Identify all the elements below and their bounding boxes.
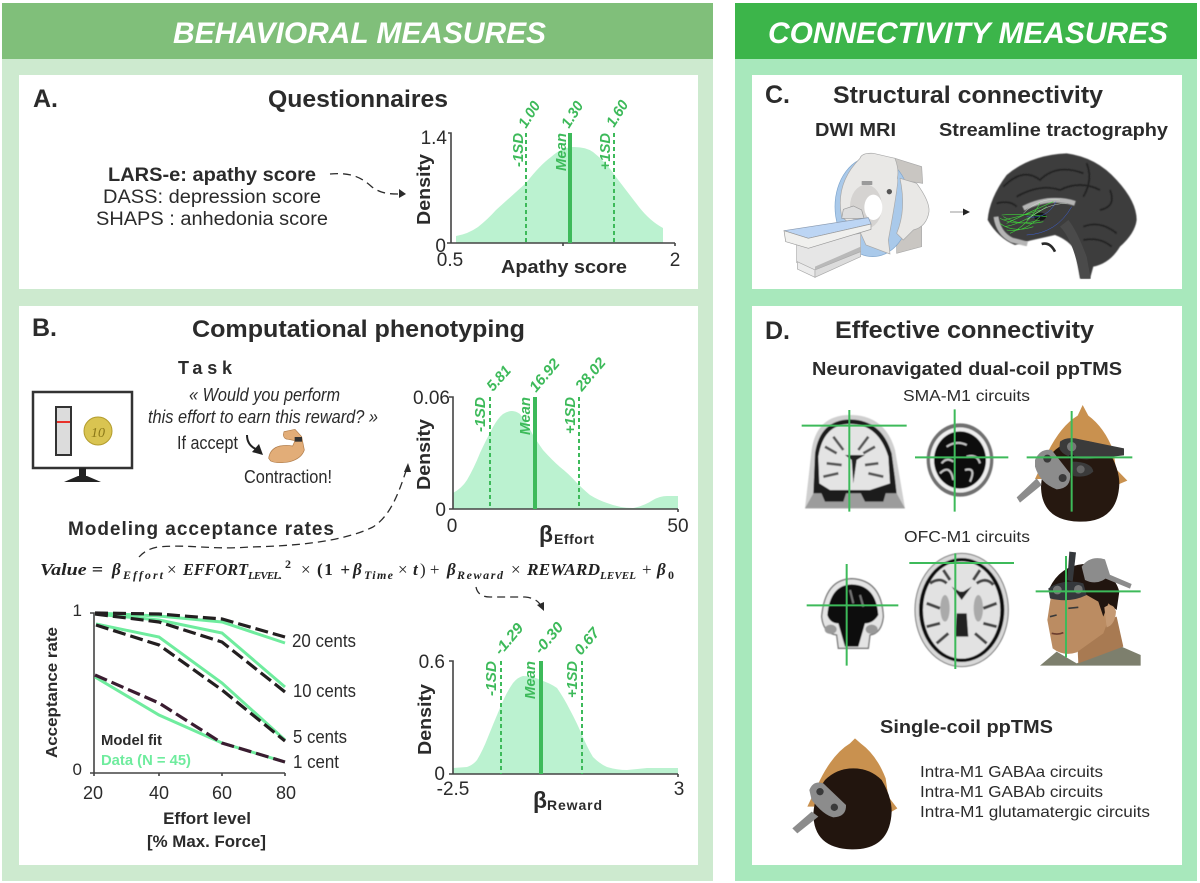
image: head with dual coils (side view) (1036, 552, 1141, 666)
panel: behavioral measures (2, 3, 713, 881)
equation (40, 557, 674, 582)
chart: acceptance rate lines: Model fit (101, 732, 162, 749)
header: connectivity measures (735, 3, 1197, 59)
text block: intra-M1 circuits (920, 764, 1150, 821)
chart: apathy score density: 0.5 (437, 250, 463, 271)
chart: reward density: 3 (674, 779, 684, 800)
equation: Effort (122, 568, 164, 582)
chart: effort density: β (539, 521, 553, 547)
equation: × (398, 560, 408, 579)
chart: apathy score density: 2 (670, 250, 680, 271)
image: coronal MRI slice (802, 410, 907, 512)
panel letter D: D. (765, 317, 790, 345)
chart: effort density: Effort (554, 531, 594, 547)
chart: apathy score density: 1.60 (603, 97, 633, 130)
header: connectivity measures: CONNECTIVITY MEASURES (768, 17, 1168, 50)
chart: reward density: 0 (434, 764, 445, 785)
text block: task: Contraction! (244, 467, 332, 487)
text block: scores: DASS: depression score (103, 187, 321, 208)
chart: acceptance rate lines: 60 (212, 783, 232, 803)
chart: effort density: 0 (447, 516, 457, 537)
equation: EFFORT (182, 560, 249, 579)
arrow: score to density (330, 174, 406, 198)
chart: reward density: Density (415, 684, 435, 755)
text block: intra-M1 circuits: Intra-M1 GABAb circuits (920, 784, 1103, 801)
equation: 0 (668, 568, 674, 582)
equation: ) + (420, 560, 440, 579)
equation: t (413, 560, 419, 579)
panel A: questionnaires (19, 75, 698, 289)
chart: effort density: Mean (517, 397, 534, 435)
chart: acceptance rate lines: 1 cent (293, 752, 339, 772)
equation: 2 (285, 557, 291, 571)
icon: MRI scanner (784, 153, 929, 277)
chart: acceptance rate lines: Data (N = 45) (101, 752, 191, 769)
equation: LEVEL. (247, 570, 282, 582)
icon: brain tractography (988, 153, 1137, 279)
chart: acceptance rate lines: 1 (73, 601, 82, 620)
text block: scores: SHAPS : anhedonia score (96, 209, 328, 230)
equation: × (511, 560, 521, 579)
chart: apathy score density: -1SD (510, 133, 527, 167)
equation: × (301, 560, 311, 579)
chart: acceptance rate lines: 10 cents (293, 681, 356, 701)
chart: reward density: Reward (547, 797, 602, 813)
panel C: structural connectivity (752, 75, 1182, 289)
chart: effort density: 50 (667, 516, 689, 537)
chart: effort density: 0 (435, 500, 446, 521)
text block: intra-M1 circuits: Intra-M1 glutamatergic circuits (920, 804, 1150, 821)
arrow: accept to contraction (247, 435, 263, 455)
chart: apathy score density: Density (414, 154, 434, 225)
text block: task: this effort to earn this reward? » (148, 407, 378, 427)
label: OFC-M1 circuits: OFC-M1 circuits (904, 529, 1030, 546)
chart: reward density: Mean (522, 661, 539, 699)
chart: apathy score density: 1.30 (558, 98, 588, 131)
chart: reward density: +1SD (564, 661, 581, 698)
panel letter B: B. (32, 314, 57, 342)
equation: × (167, 560, 177, 579)
chart: apathy score density: 1.4 (421, 128, 447, 149)
chart: reward density: -1SD (483, 661, 500, 696)
arrow: effort term to effort density (139, 463, 411, 557)
arrow: reward term to reward density (476, 587, 544, 611)
chart: effort density: +1SD (562, 397, 579, 434)
chart: reward density (415, 619, 684, 813)
equation: Value = (40, 560, 103, 579)
chart: effort density: 5.81 (483, 362, 515, 395)
arrow: MRI to tractography (950, 208, 970, 216)
text block: task: « Would you perform (189, 385, 340, 405)
chart: apathy score density: 1.00 (515, 98, 545, 131)
panel letter C: C. (765, 81, 790, 109)
chart: acceptance rate lines: 5 cents (293, 727, 347, 747)
image: frontal MRI slice (807, 564, 898, 666)
equation: β (446, 560, 456, 579)
text block: task: If accept (177, 433, 238, 453)
heading: computational phenotyping: Computational phenotyping (192, 316, 525, 343)
chart: acceptance rate lines: Acceptance rate (44, 627, 61, 758)
equation: + (642, 560, 652, 579)
equation: β (111, 560, 121, 579)
chart: acceptance rate lines: 0 (73, 760, 82, 779)
label: SMA-M1 circuits: SMA-M1 circuits (903, 388, 1030, 405)
chart: effort density: -1SD (472, 397, 489, 432)
chart: apathy score density: Apathy score (501, 257, 627, 277)
header: behavioral measures: BEHAVIORAL MEASURES (173, 17, 546, 50)
chart: acceptance rate lines: 40 (149, 783, 169, 803)
chart: apathy score density (414, 97, 680, 277)
equation: β (352, 560, 362, 579)
image: large axial MRI slice (909, 553, 1014, 669)
panel: connectivity measures (735, 3, 1197, 881)
equation: REWARD (526, 560, 600, 579)
chart: effort density: 28.02 (571, 354, 610, 395)
subheading: single-coil: Single-coil ppTMS (880, 717, 1053, 737)
subheading: DWI MRI: DWI MRI (815, 120, 896, 140)
chart: reward density: 0.6 (419, 652, 445, 673)
chart: apathy score density: +1SD (597, 133, 614, 170)
chart: reward density: -2.5 (437, 779, 469, 800)
chart: reward density: -1.29 (491, 620, 528, 659)
heading: modeling acceptance rates: Modeling acceptance rates (68, 519, 334, 540)
chart: reward density: β (533, 787, 547, 813)
image: head with single coil (792, 738, 897, 849)
text block: scores: LARS-e: apathy score (108, 165, 316, 186)
panel D: effective connectivity (752, 306, 1182, 865)
text block: task: Task (178, 358, 233, 378)
heading: effective connectivity: Effective connectivity (835, 317, 1095, 344)
chart: effort density: 16.92 (526, 355, 564, 396)
image: head with dual coils (top view) (1017, 405, 1132, 522)
panel B: computational phenotyping (19, 306, 698, 865)
chart: acceptance rate lines: [% Max. Force] (147, 832, 266, 851)
equation: β (656, 560, 666, 579)
heading: structural connectivity: Structural connectivity (833, 82, 1104, 109)
icon: task monitor: 10 (91, 426, 105, 441)
icon: task monitor (33, 392, 132, 482)
equation: Time (364, 568, 394, 582)
chart: effort density: Density (414, 419, 434, 490)
chart: acceptance rate lines: 20 cents (292, 631, 356, 651)
icon: flexed arm (269, 429, 304, 463)
equation: (1 + (317, 560, 350, 579)
chart: effort density: 0.06 (413, 388, 450, 409)
panel letter A: A. (33, 85, 58, 113)
heading: questionnaires: Questionnaires (268, 86, 448, 113)
chart: acceptance rate lines (44, 601, 356, 851)
chart: acceptance rate lines: Effort level (163, 809, 251, 828)
equation: LEVEL (599, 570, 636, 582)
text block: intra-M1 circuits: Intra-M1 GABAa circuits (920, 764, 1103, 781)
chart: acceptance rate lines: 20 (83, 783, 103, 803)
chart: acceptance rate lines: 80 (276, 783, 296, 803)
subheading: streamline tractography: Streamline tractography (939, 120, 1168, 140)
chart: apathy score density: 0 (435, 236, 446, 257)
equation: Reward (456, 568, 504, 582)
chart: apathy score density: Mean (553, 133, 570, 171)
chart: effort density (413, 354, 689, 547)
header: behavioral measures (2, 3, 713, 59)
image: axial MRI slice (915, 409, 1008, 512)
chart: reward density: -0.30 (531, 619, 568, 658)
text block: scores (96, 165, 328, 230)
subheading: dual-coil: Neuronavigated dual-coil ppTMS (812, 359, 1122, 379)
chart: reward density: 0.67 (571, 624, 604, 659)
text block: task (148, 358, 378, 487)
